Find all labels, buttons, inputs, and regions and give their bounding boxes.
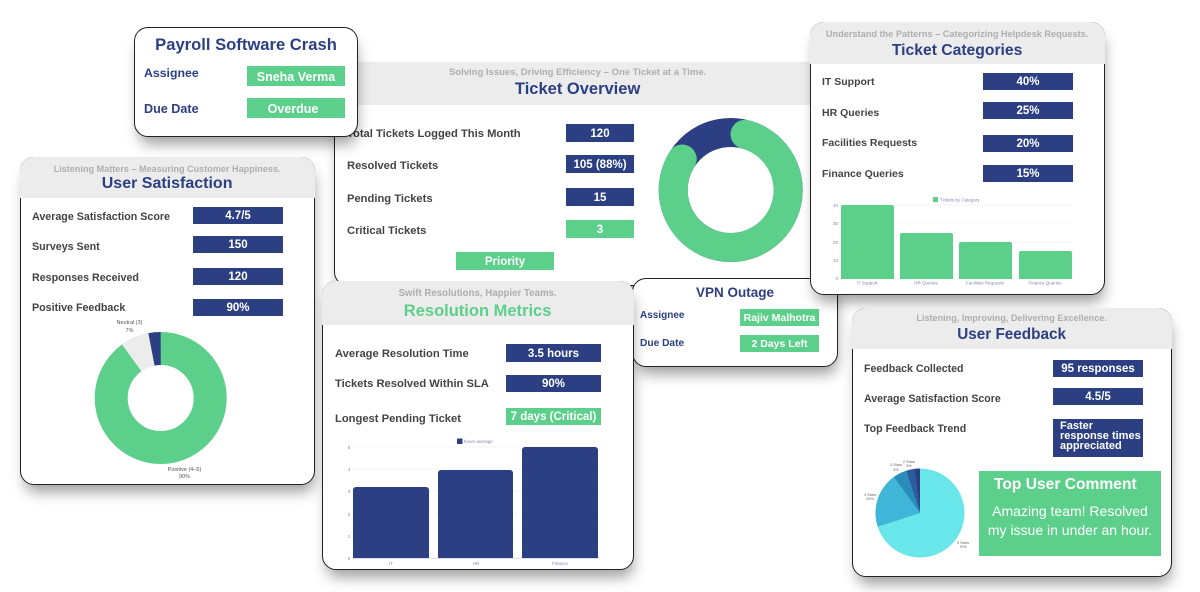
badge: resolved tickets: 105 (88%) xyxy=(573,159,627,171)
badge: positive feedback xyxy=(193,299,283,316)
feedback header: Listening, Improving, Delivering Excellence. xyxy=(916,313,1107,323)
satisfaction donut chart: 90% xyxy=(179,474,190,480)
categories bar chart: Facilities Requests xyxy=(966,280,1005,286)
payroll due date badge xyxy=(247,98,345,118)
feedback pie chart: 5% xyxy=(893,468,899,472)
VPN assignee badge: Rajiv Malhotra xyxy=(744,312,815,324)
badge: average satisfaction xyxy=(193,207,283,224)
categories bar chart: 0 xyxy=(835,276,838,281)
label: feedback collected: Feedback Collected xyxy=(864,363,964,375)
label: total tickets: Total Tickets Logged This Month xyxy=(347,128,521,140)
payroll title: Payroll Software Crash xyxy=(155,35,337,54)
feedback pie chart: 2 Stars xyxy=(903,460,915,464)
badge: responses received: 120 xyxy=(228,271,248,283)
panel: ticket categories xyxy=(810,22,1105,295)
resolution bar chart: hours average xyxy=(464,439,493,444)
badge: HR queries xyxy=(983,102,1073,119)
ticket overview header xyxy=(334,62,834,105)
label: average satisfaction score: Average Satisfaction Score xyxy=(864,393,1001,405)
resolution bar chart: IT xyxy=(389,561,393,566)
badge: longest pending ticket: 7 days (Critical) xyxy=(511,411,596,423)
payroll due date label: Due Date xyxy=(144,102,199,116)
badge: priority xyxy=(456,252,554,270)
badge: IT support xyxy=(983,73,1073,90)
badge: finance queries xyxy=(983,165,1073,182)
payroll assignee label: Assignee xyxy=(144,66,199,80)
resolution bar chart: 4 xyxy=(348,467,351,472)
comment heading: Top User Comment xyxy=(994,476,1137,493)
badge: top feedback trend: appreciated xyxy=(1060,440,1122,452)
ticket overview header: Solving Issues, Driving Efficiency – One Ticket at a Time. xyxy=(449,67,706,78)
badge: resolved within SLA: 90% xyxy=(542,378,565,390)
label: critical tickets: Critical Tickets xyxy=(347,225,426,237)
resolution bar chart: 5 xyxy=(348,445,351,450)
feedback pie chart: 20% xyxy=(866,497,874,501)
feedback header: User Feedback xyxy=(957,326,1066,343)
satisfaction donut chart: 7% xyxy=(126,328,134,334)
badge: feedback collected: 95 responses xyxy=(1061,363,1135,375)
resolution header: Resolution Metrics xyxy=(404,302,551,320)
categories bar chart: IT Support xyxy=(857,280,878,286)
feedback pie chart: 4 Stars xyxy=(864,493,876,497)
categories header: Understand the Patterns – Categorizing Helpdesk Requests. xyxy=(826,29,1088,39)
feedback pie chart: 3 Stars xyxy=(890,463,902,467)
feedback pie chart: 3% xyxy=(906,464,912,468)
VPN assignee label: Assignee xyxy=(640,310,684,321)
comment text: Amazing team! Resolved xyxy=(992,503,1148,519)
badge: feedback collected xyxy=(1053,360,1143,377)
feedback pie chart: 5 Stars xyxy=(957,541,969,545)
badge: average resolution time xyxy=(506,344,601,362)
label: top feedback trend: Top Feedback Trend xyxy=(864,423,966,435)
satisfaction donut chart: Neutral (3) xyxy=(117,320,143,326)
panel: resolution metrics xyxy=(322,281,634,570)
comment text xyxy=(988,503,1152,538)
badge: pending tickets xyxy=(566,188,634,206)
VPN assignee badge xyxy=(740,309,819,326)
badge: facilities requests: 20% xyxy=(1016,138,1040,150)
badge: priority: Priority xyxy=(485,256,525,268)
resolution bar chart: Finance xyxy=(552,561,568,566)
categories bar chart: 10 xyxy=(833,258,838,263)
resolution bar chart: 3 xyxy=(348,489,351,494)
label: resolved tickets: Resolved Tickets xyxy=(347,160,438,172)
label: facilities requests: Facilities Requests xyxy=(822,137,917,149)
categories bar chart: 30 xyxy=(833,221,838,226)
categories header: Ticket Categories xyxy=(892,42,1022,59)
categories bar chart: Finance Queries xyxy=(1028,280,1062,286)
badge: HR queries: 25% xyxy=(1016,105,1040,117)
panel: user feedback xyxy=(852,308,1172,577)
panel: user satisfaction xyxy=(20,157,315,485)
VPN due date badge xyxy=(740,335,819,352)
badge: average satisfaction: 4.7/5 xyxy=(225,210,251,222)
badge: total tickets: 120 xyxy=(590,128,610,140)
resolution bar chart: HR xyxy=(473,561,480,566)
categories header xyxy=(810,22,1105,64)
payroll assignee badge xyxy=(247,66,345,86)
label: IT support: IT Support xyxy=(822,76,874,88)
ticket overview header: Ticket Overview xyxy=(515,80,640,98)
badge: surveys sent: 150 xyxy=(228,239,248,251)
categories bar chart: Tickets by Category xyxy=(940,198,980,202)
label: HR queries: HR Queries xyxy=(822,107,879,119)
resolution bar chart: 1 xyxy=(348,534,351,539)
badge: facilities requests xyxy=(983,135,1073,152)
categories bar chart: 40 xyxy=(833,203,838,208)
badge: pending tickets: 15 xyxy=(594,192,606,204)
badge: positive feedback: 90% xyxy=(226,302,250,314)
badge: critical tickets: 3 xyxy=(597,224,603,236)
badge: resolved within SLA xyxy=(506,375,601,392)
resolution bar chart: 0 xyxy=(348,556,351,561)
panel: payroll software crash xyxy=(134,27,358,137)
satisfaction donut chart: Positive (4–5) xyxy=(168,467,201,473)
callout: top user comment xyxy=(979,471,1161,556)
badge: top feedback trend xyxy=(1053,419,1143,457)
badge: resolved tickets xyxy=(566,155,634,173)
badge: longest pending ticket xyxy=(506,408,601,425)
panel: ticket overview xyxy=(334,62,834,286)
label: resolved within SLA: Tickets Resolved Within SLA xyxy=(335,378,489,390)
panel: VPN outage xyxy=(632,278,838,367)
user satisfaction header: User Satisfaction xyxy=(102,175,232,192)
label: average satisfaction: Average Satisfaction Score xyxy=(32,211,170,223)
badge: IT support: 40% xyxy=(1016,76,1040,88)
resolution bar chart: 2 xyxy=(348,512,351,517)
VPN title: VPN Outage xyxy=(696,285,774,300)
user satisfaction header: Listening Matters – Measuring Customer Happiness. xyxy=(54,164,281,174)
payroll due date badge: Overdue xyxy=(268,102,318,116)
badge: average score xyxy=(1053,388,1143,405)
label: pending tickets: Pending Tickets xyxy=(347,193,433,205)
user satisfaction header xyxy=(20,157,315,198)
label: longest pending ticket: Longest Pending Ticket xyxy=(335,413,461,425)
label: positive feedback: Positive Feedback xyxy=(32,302,125,314)
badge: total tickets xyxy=(566,124,634,142)
badge: average resolution time: 3.5 hours xyxy=(528,348,579,360)
badge: finance queries: 15% xyxy=(1016,168,1040,180)
badge: critical tickets xyxy=(566,220,634,238)
badge: top feedback trend: Faster xyxy=(1060,420,1093,432)
categories bar chart: 20 xyxy=(833,240,838,245)
label: surveys sent: Surveys Sent xyxy=(32,241,100,253)
payroll assignee badge: Sneha Verma xyxy=(257,70,335,84)
resolution header xyxy=(322,281,634,325)
resolution header: Swift Resolutions, Happier Teams. xyxy=(399,288,557,299)
comment text: my issue in under an hour. xyxy=(988,522,1152,538)
badge: surveys sent xyxy=(193,236,283,253)
label: average resolution time: Average Resolution Time xyxy=(335,348,469,360)
feedback header xyxy=(852,308,1172,349)
badge: top feedback trend: response times xyxy=(1060,430,1141,442)
badge: average score: 4.5/5 xyxy=(1085,391,1111,403)
label: responses received: Responses Received xyxy=(32,272,139,284)
badge: responses received xyxy=(193,268,283,285)
categories bar chart: HR Queries xyxy=(914,280,938,286)
feedback pie chart: 70% xyxy=(959,545,967,549)
VPN due date badge: 2 Days Left xyxy=(751,338,808,350)
label: finance queries: Finance Queries xyxy=(822,168,904,180)
VPN due date label: Due Date xyxy=(640,338,684,349)
